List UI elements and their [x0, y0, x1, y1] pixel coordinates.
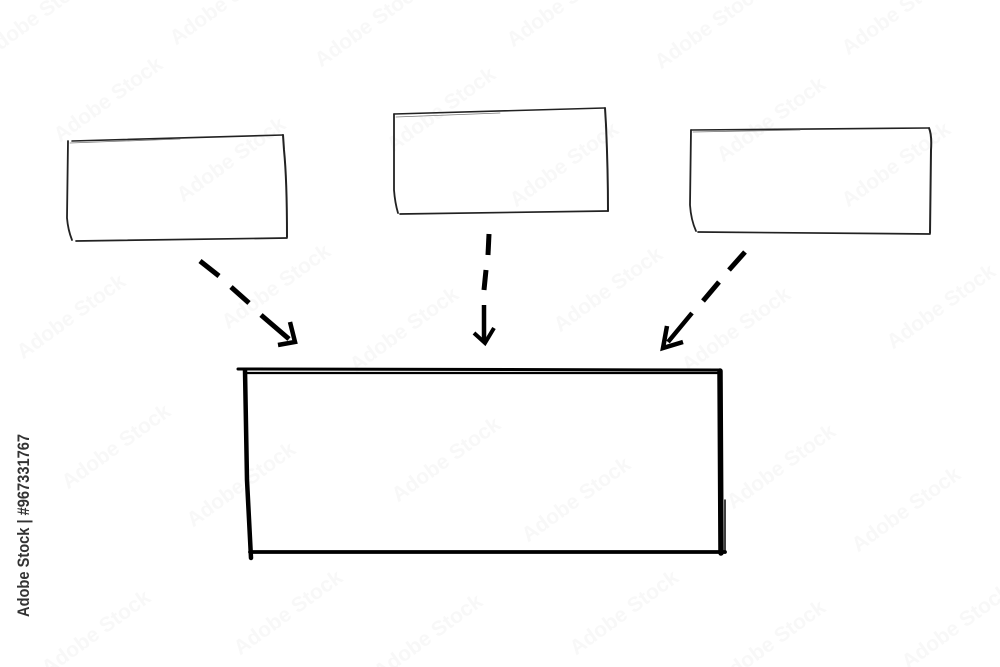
watermark pattern: Adobe Stock: [505, 118, 623, 212]
watermark pattern: Adobe Stock: [882, 260, 1000, 354]
watermark pattern: Adobe Stock: [172, 113, 290, 207]
box: top centre: [394, 108, 608, 214]
box: top right: [690, 128, 931, 234]
watermark pattern: Adobe Stock: [722, 420, 840, 514]
watermark pattern: Adobe Stock: [49, 53, 167, 147]
watermark pattern: Adobe Stock: [847, 463, 965, 557]
watermark pattern: Adobe Stock: [387, 413, 505, 507]
watermark pattern: Adobe Stock: [517, 453, 635, 547]
watermark pattern: Adobe Stock: [182, 438, 300, 532]
watermark pattern: Adobe Stock: [712, 73, 830, 167]
watermark pattern: Adobe Stock: [57, 400, 175, 494]
watermark pattern: Adobe Stock: [837, 118, 955, 212]
watermark pattern: Adobe Stock: [565, 566, 683, 660]
watermark pattern: Adobe Stock: [549, 243, 667, 337]
watermark pattern: Adobe Stock: [345, 283, 463, 377]
watermark pattern: Adobe Stock: [382, 63, 500, 157]
watermark pattern: Adobe Stock: [677, 283, 795, 377]
arrow: centre box to main box: [474, 234, 494, 343]
watermark pattern: Adobe Stock: [12, 270, 130, 364]
watermark pattern: Adobe Stock: [217, 240, 335, 334]
arrow: left box to main box: [200, 261, 295, 345]
arrow: right box to main box: [663, 252, 745, 348]
box: main bottom: [238, 369, 725, 558]
box: top left: [67, 135, 287, 241]
watermark pattern: Adobe Stock: [229, 566, 347, 660]
stock id label: Adobe Stock | #967331767: [14, 434, 33, 617]
